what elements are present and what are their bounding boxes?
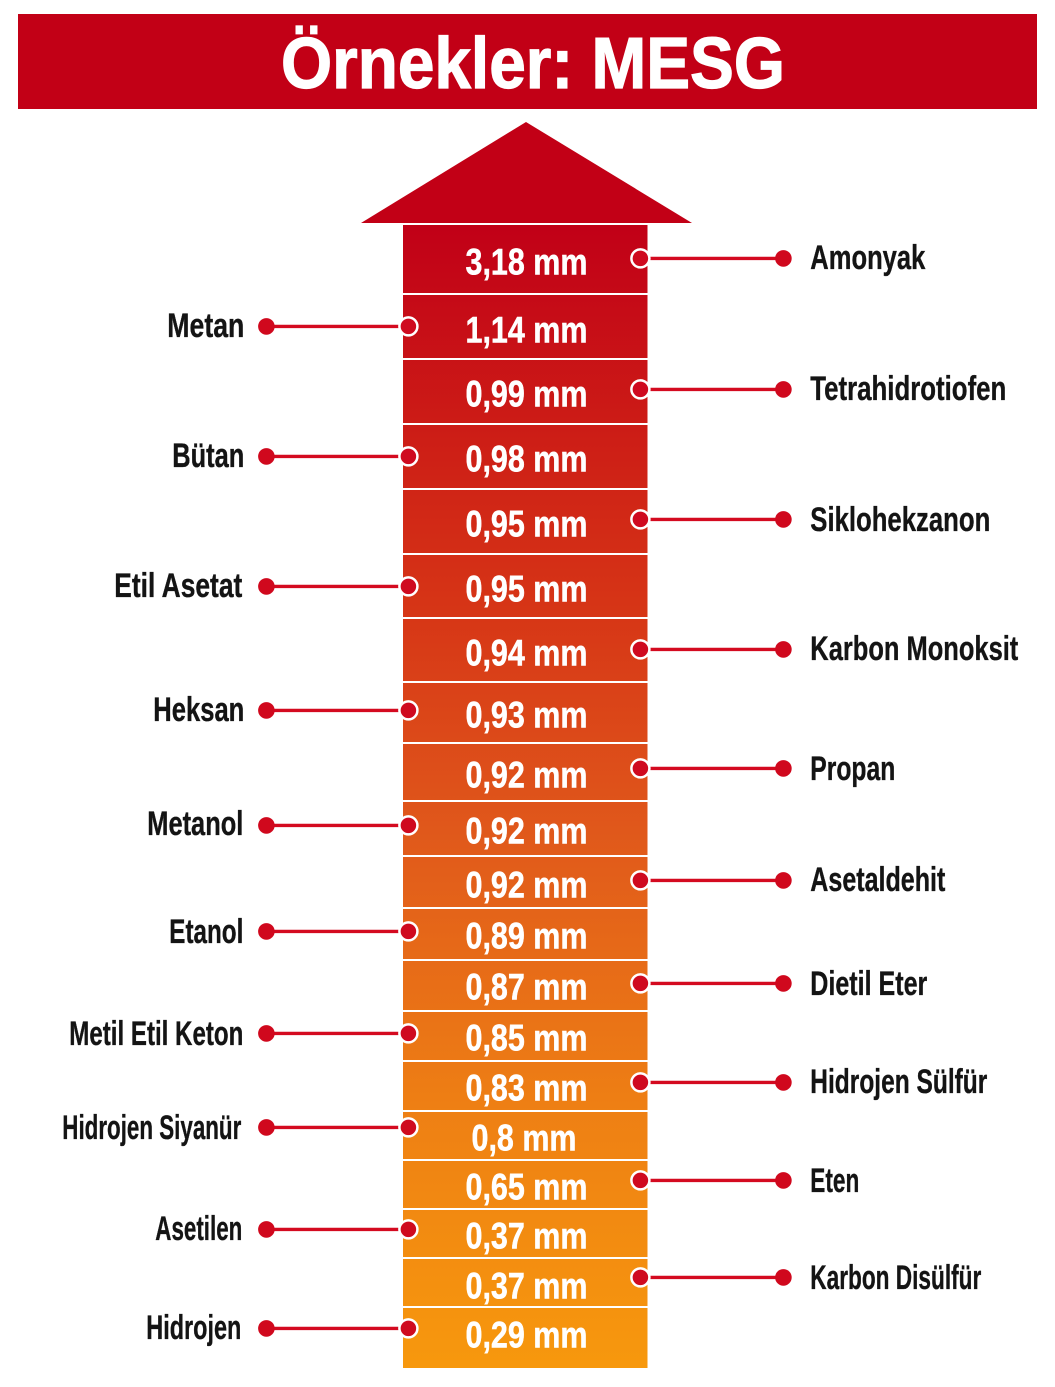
right labels and connectors: [631, 239, 1018, 1297]
callout: Propan: Propan: [810, 750, 895, 788]
callout: Metanol: Metanol: [147, 805, 243, 843]
row: 0,92 mm third: 0,92 mm: [466, 865, 588, 906]
row: 0,37 mm second: 0,37 mm: [466, 1266, 588, 1307]
callout: Hidrojen Sülfür: [631, 1063, 987, 1101]
row: 0,83 mm: [403, 1062, 648, 1110]
callout: Hidrojen Sülfür: Hidrojen Sülfür: [810, 1063, 987, 1101]
row: 0,98 mm: [403, 425, 648, 488]
callout: Bütan: [172, 437, 417, 475]
callout: Hidrojen: [146, 1309, 417, 1347]
row: 0,8 mm: [403, 1112, 648, 1159]
callout: Etanol: Etanol: [169, 913, 243, 951]
callout: Siklohekzanon: [631, 501, 990, 539]
callout: Asetaldehit: [631, 861, 945, 899]
row: 0,89 mm: 0,89 mm: [466, 916, 588, 957]
row: 0,99 mm: 0,99 mm: [466, 374, 588, 415]
row: 0,98 mm: 0,98 mm: [466, 439, 588, 480]
row: 0,92 mm: 0,92 mm: [466, 755, 588, 796]
callout: Eten: Eten: [810, 1162, 859, 1200]
callout: Metan: Metan: [167, 307, 244, 345]
row: 0,85 mm: [403, 1012, 648, 1060]
callout: Amonyak: [631, 239, 925, 277]
row: 0,92 mm: [403, 744, 648, 800]
row: 0,94 mm: [403, 619, 648, 681]
title banner: Örnekler: MESG: [281, 24, 785, 104]
callout: Heksan: Heksan: [153, 691, 244, 729]
row: 0,93 mm: 0,93 mm: [466, 695, 588, 736]
callout: Heksan: [153, 691, 417, 729]
callout: Asetilen: Asetilen: [155, 1210, 242, 1248]
row: 0,95 mm: [403, 490, 648, 553]
callout: Etil Asetat: Etil Asetat: [114, 567, 242, 605]
row: 1,14 mm: 1,14 mm: [466, 310, 588, 351]
row: 0,83 mm: 0,83 mm: [466, 1068, 588, 1109]
callout: Dietil Eter: Dietil Eter: [810, 965, 927, 1003]
callout: Tetrahidrotiofen: [631, 370, 1006, 408]
callout: Dietil Eter: [631, 965, 927, 1003]
row: 3,18 mm: 3,18 mm: [466, 242, 588, 283]
row: 0,65 mm: 0,65 mm: [466, 1167, 588, 1208]
row: 0,95 mm: 0,95 mm: [466, 504, 588, 545]
row: 0,93 mm: [403, 683, 648, 742]
row: 0,92 mm second: 0,92 mm: [466, 811, 588, 852]
row: 0,65 mm: [403, 1161, 648, 1208]
title banner: [18, 14, 1037, 109]
row: 0,37 mm: 0,37 mm: [466, 1216, 588, 1257]
row: 0,8 mm: 0,8 mm: [472, 1118, 576, 1159]
row: 0,92 mm second: [403, 802, 648, 855]
callout: Hidrojen Siyanür: Hidrojen Siyanür: [62, 1109, 241, 1147]
row: 0,99 mm: [403, 360, 648, 423]
row: 0,94 mm: 0,94 mm: [466, 633, 588, 674]
callout: Karbon Disülfür: [631, 1259, 981, 1297]
arrow head: [361, 122, 692, 223]
row: 0,85 mm: 0,85 mm: [466, 1018, 588, 1059]
callout: Propan: [631, 750, 895, 788]
callout: Metan: [167, 307, 417, 345]
row: 3,18 mm: [403, 225, 648, 293]
row: 0,37 mm: [403, 1210, 648, 1257]
row: 0,92 mm third: [403, 857, 648, 907]
row: 0,95 mm second: 0,95 mm: [466, 569, 588, 610]
row: 0,87 mm: [403, 961, 648, 1010]
callout: Eten: [631, 1162, 859, 1200]
callout: Metil Etil Keton: Metil Etil Keton: [69, 1015, 243, 1053]
arrow shaft with value rows: [403, 225, 648, 1368]
callout: Asetilen: [155, 1210, 417, 1248]
callout: Amonyak: Amonyak: [810, 239, 925, 277]
left labels and connectors: [62, 307, 417, 1347]
callout: Siklohekzanon: Siklohekzanon: [810, 501, 990, 539]
callout: Etanol: [169, 913, 417, 951]
row: 1,14 mm: [403, 295, 648, 358]
row: 0,29 mm: [403, 1308, 648, 1368]
row: 0,89 mm: [403, 909, 648, 959]
callout: Bütan: Bütan: [172, 437, 244, 475]
callout: Etil Asetat: [114, 567, 417, 605]
callout: Asetaldehit: Asetaldehit: [810, 861, 945, 899]
row: 0,87 mm: 0,87 mm: [466, 967, 588, 1008]
callout: Metanol: [147, 805, 417, 843]
callout: Karbon Monoksit: [631, 630, 1018, 668]
row: 0,95 mm second: [403, 555, 648, 617]
row: 0,29 mm: 0,29 mm: [466, 1315, 588, 1356]
callout: Hidrojen: Hidrojen: [146, 1309, 241, 1347]
row: 0,37 mm second: [403, 1259, 648, 1307]
